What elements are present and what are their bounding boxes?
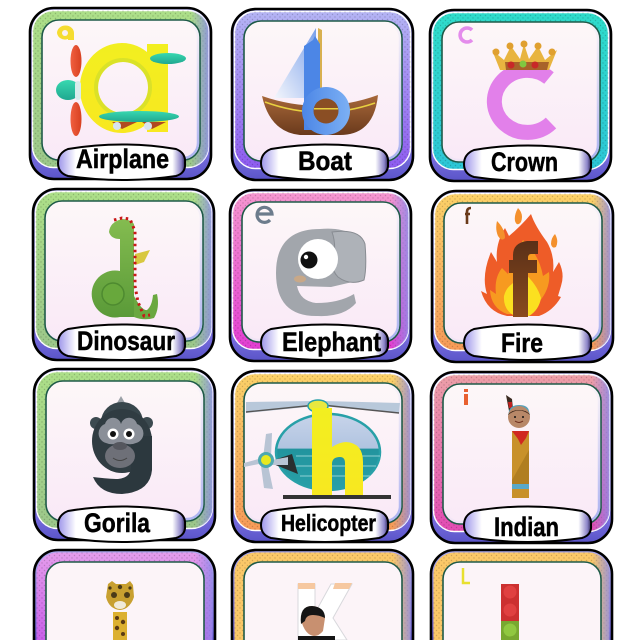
panel: Crown card: Crown xyxy=(491,147,558,177)
panel: Indian card: Indian xyxy=(494,512,559,542)
panel: Fire card xyxy=(432,191,613,362)
panel: Karate card xyxy=(232,550,413,640)
panel: Gorilla card: Gorila xyxy=(84,508,151,538)
panel: Jaguar card xyxy=(34,550,215,640)
panel: Indian card xyxy=(431,372,612,543)
panel: Helicopter card: Helicopter xyxy=(281,510,376,536)
panel: Boat card xyxy=(232,9,413,180)
panel: Airplane card: Airplane xyxy=(76,144,169,174)
panel: Dinosaur card: Dinosaur xyxy=(77,326,175,356)
panel: Dinosaur card xyxy=(33,189,214,360)
panel: Lego card xyxy=(431,550,612,640)
panel: Airplane card xyxy=(30,8,211,180)
panel: Elephant card xyxy=(230,190,411,361)
panel: Crown card xyxy=(430,10,611,181)
panel: Fire card: Fire xyxy=(501,328,543,358)
panel: Helicopter card xyxy=(232,371,413,542)
panel: Gorilla card xyxy=(34,369,215,542)
panel: Boat card: Boat xyxy=(298,146,352,176)
panel: Elephant card: Elephant xyxy=(282,327,381,357)
